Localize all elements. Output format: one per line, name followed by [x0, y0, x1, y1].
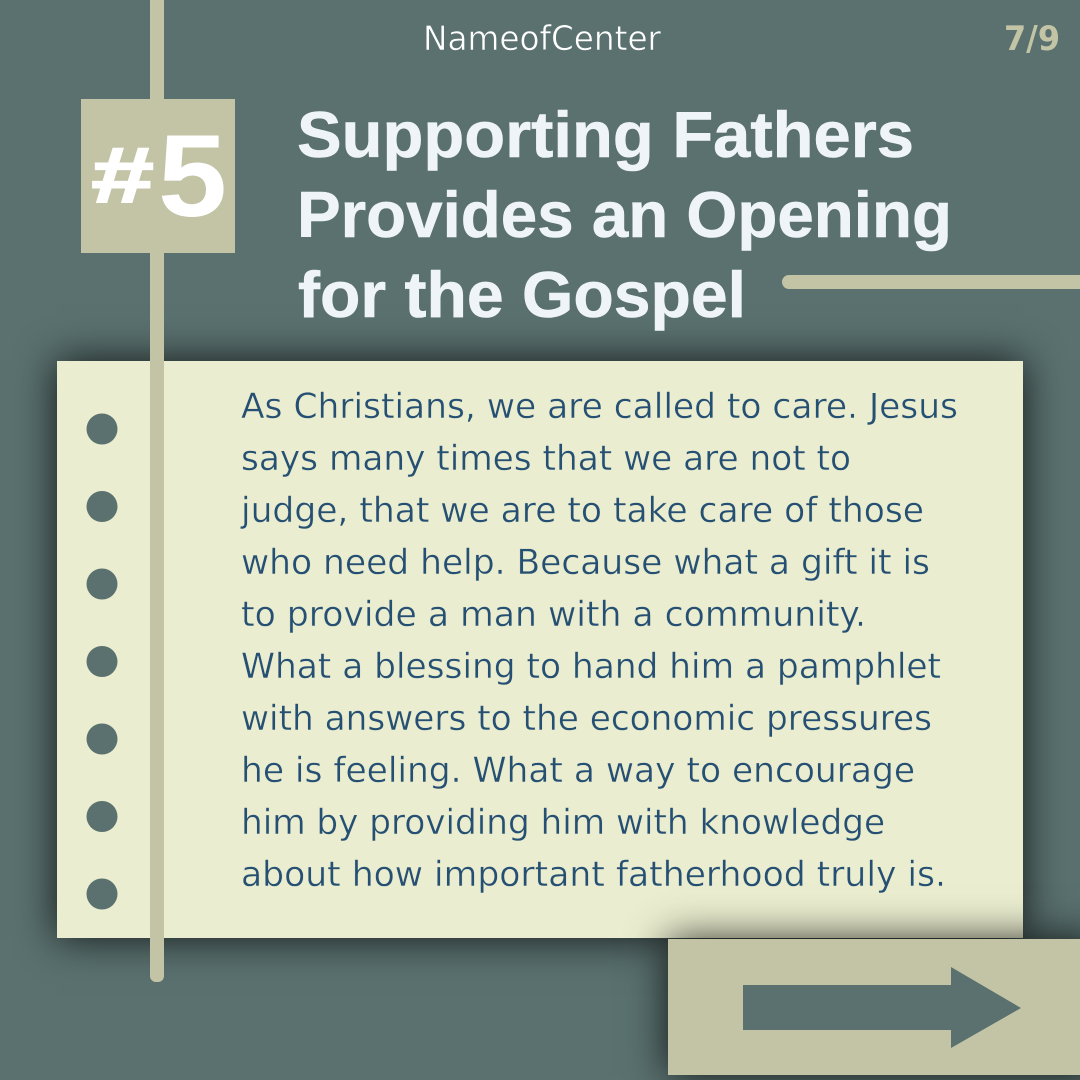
notebook panel [57, 361, 1023, 938]
title: for the Gospel [298, 258, 746, 331]
punched hole dots [86, 414, 118, 910]
body text: to provide a man with a community. [241, 595, 866, 635]
body text: judge, that we are to take care of those [240, 491, 924, 531]
title: Supporting Fathers [297, 98, 914, 171]
next-page box [668, 939, 1080, 1075]
vertical rod [150, 0, 164, 982]
body text: about how important fatherhood truly is. [241, 855, 946, 895]
title: Provides an Opening [297, 178, 952, 251]
badge text: # [90, 131, 153, 219]
page counter: 7/9 [1004, 19, 1060, 59]
body text: who need help. Because what a gift it is [241, 543, 930, 583]
body text: him by providing him with knowledge [241, 803, 885, 843]
body text: with answers to the economic pressures [241, 699, 932, 739]
number badge [81, 99, 235, 253]
badge text: 5 [158, 110, 227, 241]
body text: What a blessing to hand him a pamphlet [241, 647, 941, 687]
body text: says many times that we are not to [241, 439, 851, 479]
icon: arrow [743, 967, 1021, 1048]
horizontal accent line [782, 275, 1080, 289]
title [297, 98, 952, 331]
badge text [90, 110, 227, 241]
header: center name: NameofCenter [423, 19, 661, 59]
body text: he is feeling. What a way to encourage [241, 751, 915, 791]
body text: As Christians, we are called to care. Jesus [241, 387, 958, 427]
